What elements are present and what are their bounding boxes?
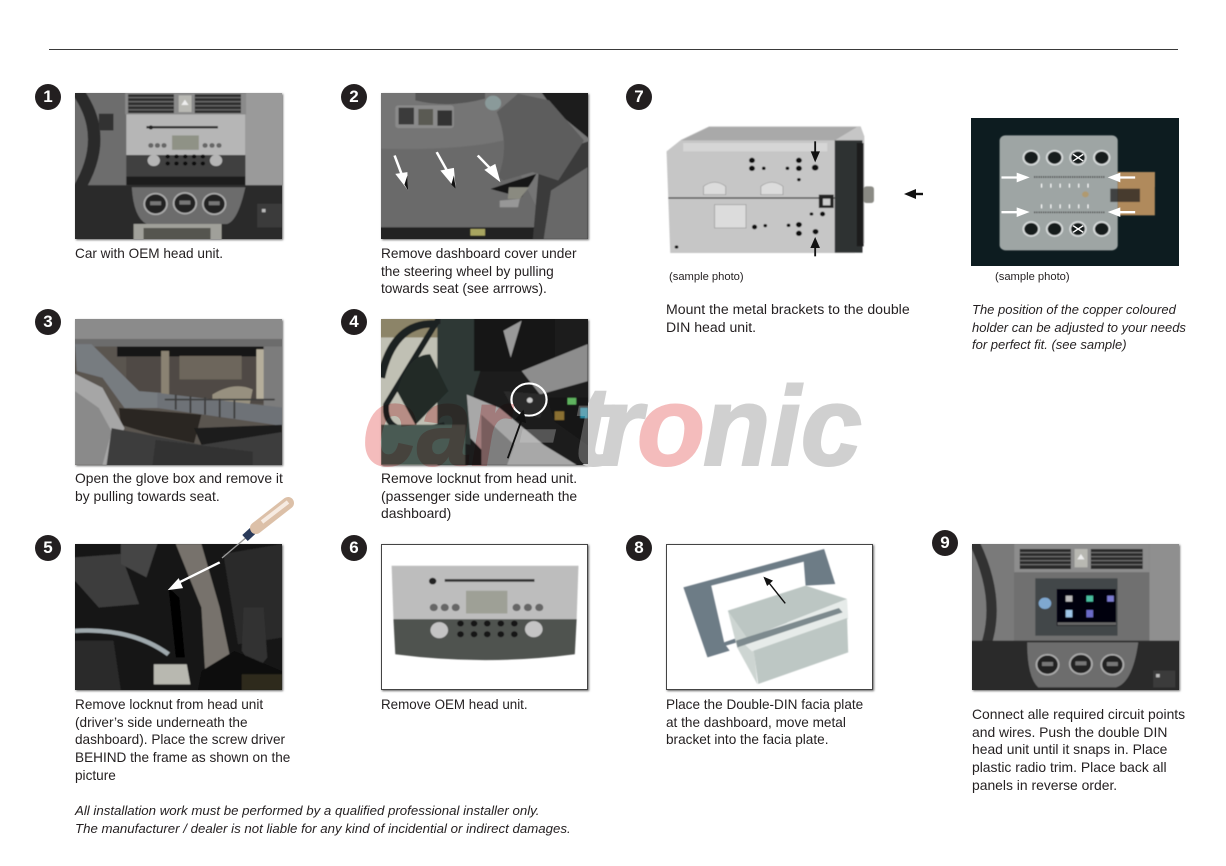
number badge 5 [35,535,61,561]
number badge 8 [626,535,652,561]
panel: step 3 [35,309,284,504]
caption step 8: bracket into the facia plate. [666,732,828,747]
caption step 2: the steering wheel by pulling [381,264,554,279]
caption step 4 [381,470,577,521]
photo: installed double DIN unit [972,544,1179,690]
number badge 4: 4 [349,312,359,331]
number badge 3: 3 [43,312,53,331]
panel: step 2 [341,84,590,296]
caption step 7 right: for perfect fit. (see sample) [972,337,1127,352]
number badge 2: 2 [349,87,359,106]
caption step 4: Remove locknut from head unit. [381,470,577,486]
photo: car with OEM head unit [75,93,282,239]
panel: step 6 [341,535,590,712]
caption step 4: (passenger side underneath the [381,488,577,504]
number badge 3 [35,309,61,335]
caption step 2: Remove dashboard cover under [381,246,577,261]
number badge 5: 5 [43,538,53,557]
photo: driver side locknut [75,544,282,690]
caption step 9: and wires. Push the double DIN [972,724,1167,740]
sample photo label left: (sample photo) [669,271,744,283]
number badge 2 [341,84,367,110]
panel: step 8 [626,535,876,747]
caption step 7 right: holder can be adjusted to your needs [972,320,1186,335]
caption step 7 left: DIN head unit. [666,319,756,335]
number badge 7: 7 [634,87,644,106]
photo: glove box removed [75,319,282,465]
number badge 6: 6 [349,538,359,557]
disclaimer note: The manufacturer / dealer is not liable for any kind of incidential or indirect damages. [75,821,571,836]
caption step 5: BEHIND the frame as shown on the [75,750,290,765]
panel: step 9 [932,530,1185,793]
caption step 7 left: Mount the metal brackets to the double [666,301,910,317]
caption step 5: dashboard). Place the screw driver [75,732,285,747]
caption step 7 left [666,301,910,335]
photo: passenger side locknut [381,319,588,465]
number badge 6 [341,535,367,561]
caption step 7 right: The position of the copper coloured [972,302,1176,317]
number badge 9: 9 [940,533,950,552]
panel: step 7 [626,84,1186,352]
caption step 7 right [972,302,1186,352]
number badge 8: 8 [634,538,644,557]
disclaimer note: All installation work must be performed by a qualified professional installer only. [75,803,539,818]
caption step 3: by pulling towards seat. [75,488,220,504]
caption step 9: head unit until it snaps in. Place [972,741,1167,757]
photo: dashboard cover with arrows [381,93,588,239]
caption step 9: plastic radio trim. Place back all [972,759,1167,775]
icon: screwdriver [222,497,294,558]
photo: bracket with copper holder [971,118,1179,266]
panel: step 5 [35,497,294,783]
watermark: car-tronic logo [363,375,862,475]
caption step 6: Remove OEM head unit. [381,697,528,712]
photo: removed OEM head unit [381,544,588,690]
caption step 2: towards seat (see arrrows). [381,281,547,296]
number badge 4 [341,309,367,335]
caption step 4: dashboard) [381,505,451,521]
caption step 3 [75,470,283,504]
caption step 9: panels in reverse order. [972,777,1117,793]
top rule [49,49,1178,50]
caption step 9: Connect alle required circuit points [972,706,1185,722]
caption step 5: Remove locknut from head unit [75,697,263,712]
caption step 8 [666,697,863,747]
caption step 1: Car with OEM head unit. [75,246,223,261]
number badge 1 [35,84,61,110]
panel: step 1 [35,84,284,261]
number badge 9 [932,530,958,556]
panel: step 4 [341,309,590,521]
caption step 8: Place the Double-DIN facia plate [666,697,863,712]
photo: metal brackets on double DIN unit [666,126,875,256]
caption step 5 [75,697,290,783]
number badge 7 [626,84,652,110]
caption step 2 [381,246,577,296]
caption step 3: Open the glove box and remove it [75,470,283,486]
photo: facia plate and metal bracket [666,544,873,690]
caption step 8: at the dashboard, move metal [666,715,846,730]
disclaimer note [74,803,571,836]
caption step 5: picture [75,768,116,783]
sample photo label right: (sample photo) [995,271,1070,283]
number badge 1: 1 [43,87,53,106]
icon: arrow left [904,189,923,199]
caption step 5: (driver’s side underneath the [75,715,248,730]
caption step 9 [972,706,1185,793]
